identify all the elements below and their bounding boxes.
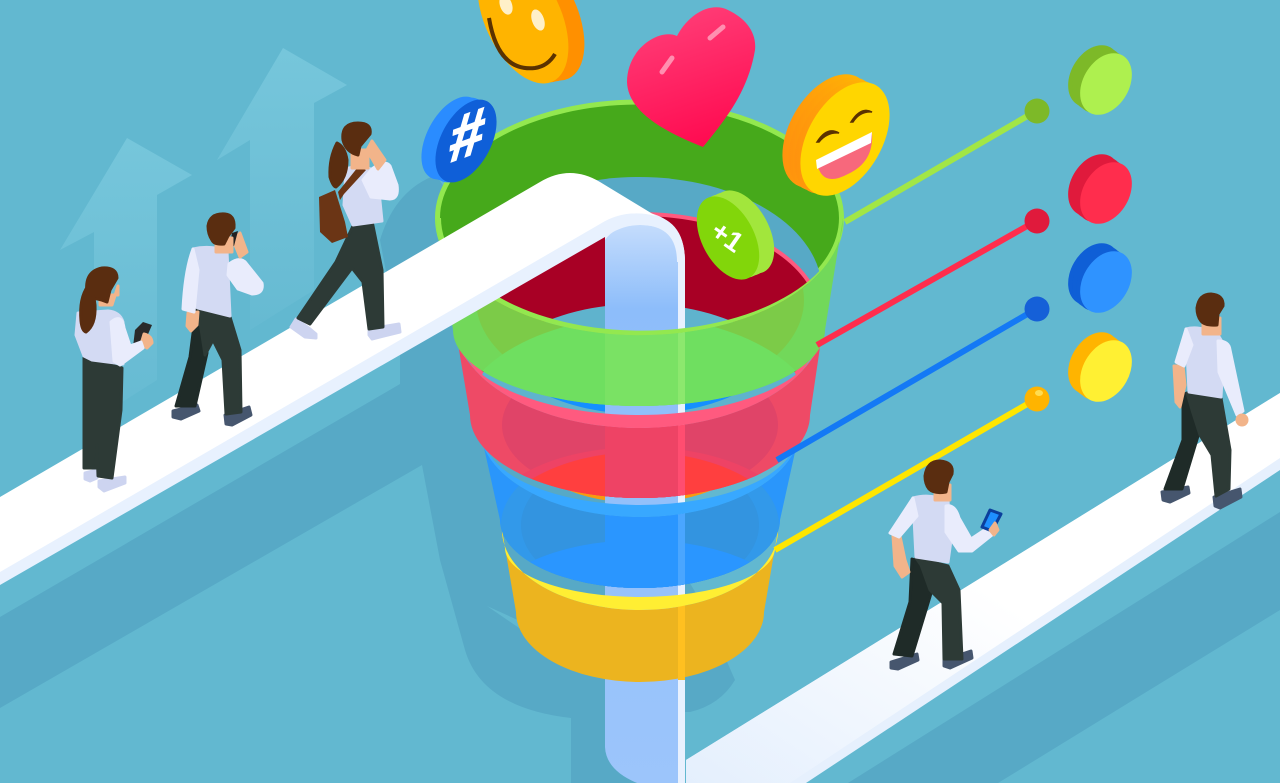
icon: hashtag coin: # — [447, 92, 488, 177]
person: man with blue phone — [890, 461, 1001, 669]
road left — [0, 173, 685, 585]
icon: plus one coin: +1 — [705, 215, 749, 258]
icon: smiley coin — [459, 0, 603, 98]
icon: plus one coin — [684, 180, 787, 290]
connector line blue — [777, 296, 1050, 460]
funnel band yellow — [502, 530, 778, 682]
connector line green — [845, 98, 1050, 222]
funnel band blue — [484, 448, 795, 588]
background arrow right — [217, 48, 347, 330]
ground shadow highlight — [487, 606, 522, 630]
person: woman with backpack — [291, 123, 400, 339]
ground shadow right — [848, 512, 1280, 783]
icon: heart — [627, 7, 755, 147]
funnel back walls — [438, 102, 842, 503]
funnel band red — [458, 348, 820, 498]
icon: hashtag coin — [409, 87, 509, 192]
ground shadow left — [0, 175, 735, 783]
data pipe — [605, 214, 685, 783]
icon: green disc — [1058, 36, 1142, 124]
funnel band green — [436, 218, 843, 406]
icon: yellow disc — [1058, 323, 1142, 411]
person: man walking away — [1162, 294, 1247, 508]
connector line yellow — [775, 386, 1050, 550]
person: woman with phone in hand — [76, 268, 152, 491]
background arrow left — [60, 138, 192, 420]
icon: blue disc — [1058, 234, 1142, 322]
person: man talking on phone — [173, 214, 262, 425]
icon: red disc — [1058, 145, 1142, 233]
road right — [686, 393, 1280, 783]
connector line red — [817, 208, 1050, 345]
icon: laughing coin — [764, 59, 908, 211]
